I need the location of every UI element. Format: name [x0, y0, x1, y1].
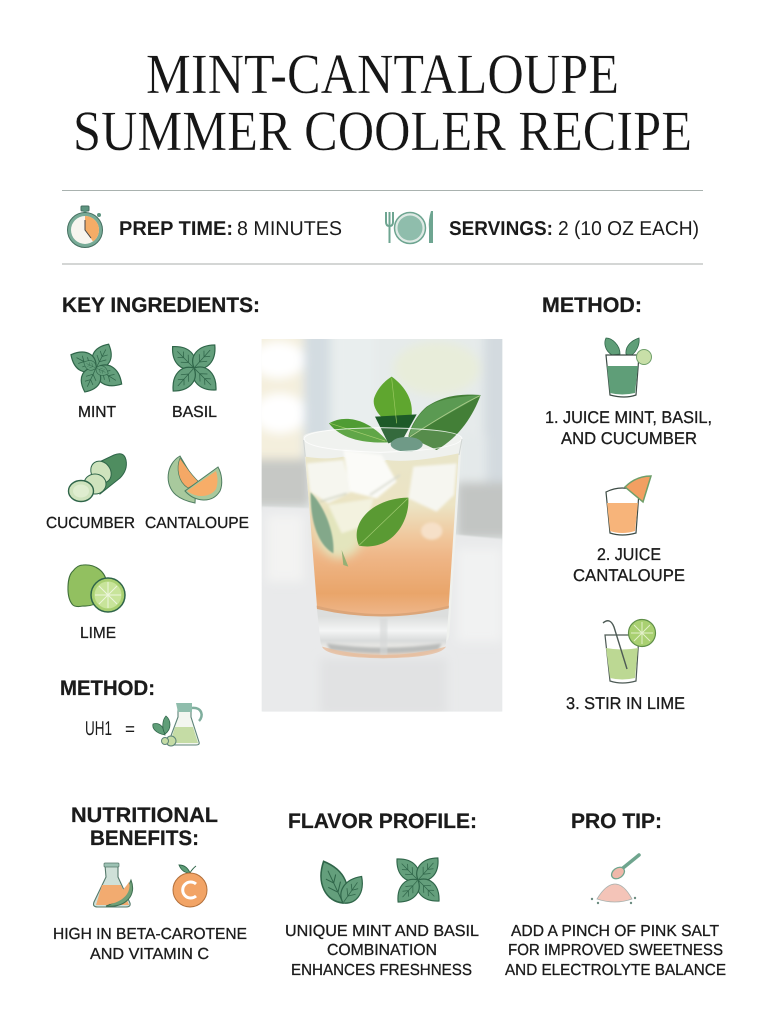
- label: lime: LIME: [80, 625, 116, 642]
- servings text: SERVINGS:: [449, 218, 553, 240]
- benefits text: HIGH IN BETA-CAROTENE: [53, 926, 247, 943]
- pale green haze: [317, 505, 363, 558]
- prep time text: PREP TIME:: [119, 218, 233, 240]
- panel: method left: [60, 677, 202, 746]
- panel: pro tip: [505, 810, 726, 979]
- icon: stopwatch: [68, 206, 102, 248]
- title: MINT-CANTALOUPE: [146, 43, 619, 106]
- flavor text: UNIQUE MINT AND BASIL: [285, 923, 479, 940]
- heading: key ingredients: KEY INGREDIENTS:: [62, 294, 260, 317]
- heading: nutritional benefits: [71, 804, 218, 850]
- pro tip text: ADD A PINCH OF PINK SALT: [511, 923, 719, 940]
- icon: lime: [68, 565, 125, 612]
- step 3 text: 3. STIR IN LIME: [566, 694, 685, 713]
- panel: flavor profile: [285, 810, 479, 979]
- info row: servings: [386, 211, 699, 244]
- heading: nutritional benefits: NUTRITIONAL: [71, 804, 218, 827]
- heading: method: METHOD:: [542, 294, 642, 317]
- icon: mint leaves: [313, 856, 369, 908]
- panel: key ingredients: [46, 294, 260, 642]
- heading: pro tip: PRO TIP:: [571, 810, 662, 833]
- info row: servings: 2 (10 OZ EACH): [558, 218, 699, 240]
- window background: [262, 339, 502, 540]
- step 1 text: 1. JUICE MINT, BASIL,: [545, 408, 712, 427]
- panel: nutritional benefits: [53, 804, 247, 963]
- label: cantaloupe: CANTALOUPE: [145, 515, 249, 532]
- ice cubes: [307, 450, 457, 540]
- icon: vitamin C orange: [173, 865, 207, 907]
- submerged side leaf: [311, 492, 333, 553]
- info row: prep time: [68, 206, 342, 248]
- liquid: [305, 453, 459, 618]
- benefits text: [53, 926, 247, 963]
- flavor text: [285, 923, 479, 979]
- garbled formula text: UH1: [85, 718, 112, 740]
- title: SUMMER COOLER RECIPE: [73, 100, 692, 163]
- benefits text: AND VITAMIN C: [90, 946, 209, 963]
- equals sign: =: [125, 719, 135, 739]
- glass base: [317, 606, 449, 658]
- icon: spoon and pink salt: [591, 855, 639, 904]
- pro tip text: AND ELECTROLYTE BALANCE: [505, 962, 726, 979]
- info row: prep time: 8 MINUTES: [237, 218, 342, 240]
- flavor text: COMBINATION: [327, 942, 437, 959]
- icon: pitcher with leaves: [153, 703, 202, 746]
- label: mint: MINT: [78, 404, 116, 421]
- panel: method right: [542, 294, 712, 713]
- step 2 text: [573, 545, 685, 585]
- glass body: [304, 430, 461, 536]
- icon: mint: [67, 340, 127, 396]
- icon: cantaloupe: [168, 456, 222, 503]
- step 2 text: CANTALOUPE: [573, 566, 685, 585]
- heading: method: METHOD:: [60, 677, 155, 700]
- submerged mint leaf: [357, 498, 408, 546]
- title: [73, 43, 692, 163]
- icon: lime drink with straw: [603, 620, 656, 683]
- table: [262, 506, 502, 543]
- flavor text: ENHANCES FRESHNESS: [291, 962, 472, 979]
- icon: basil leaves: [391, 852, 445, 908]
- glass rim: [304, 428, 462, 452]
- mint garnish: [329, 377, 481, 452]
- icon: basil: [166, 339, 222, 397]
- heading: flavor profile: FLAVOR PROFILE:: [288, 810, 477, 833]
- icon: cantaloupe juice glass: [606, 476, 651, 535]
- photo: cocktail glass: [262, 339, 502, 712]
- icon: flask with melon: [94, 863, 133, 907]
- pro tip text: FOR IMPROVED SWEETNESS: [508, 942, 723, 959]
- pro tip text: [505, 923, 726, 979]
- step 1 text: AND CUCUMBER: [561, 429, 697, 448]
- label: basil: BASIL: [172, 404, 217, 421]
- step 2 text: 2. JUICE: [597, 545, 661, 564]
- icon: plate and cutlery: [386, 211, 433, 244]
- heading: nutritional benefits: BENEFITS:: [90, 827, 199, 850]
- label: cucumber: CUCUMBER: [46, 515, 135, 532]
- icon: green juice glass: [605, 338, 652, 397]
- step 1 text: [545, 408, 712, 448]
- icon: cucumber: [68, 454, 126, 502]
